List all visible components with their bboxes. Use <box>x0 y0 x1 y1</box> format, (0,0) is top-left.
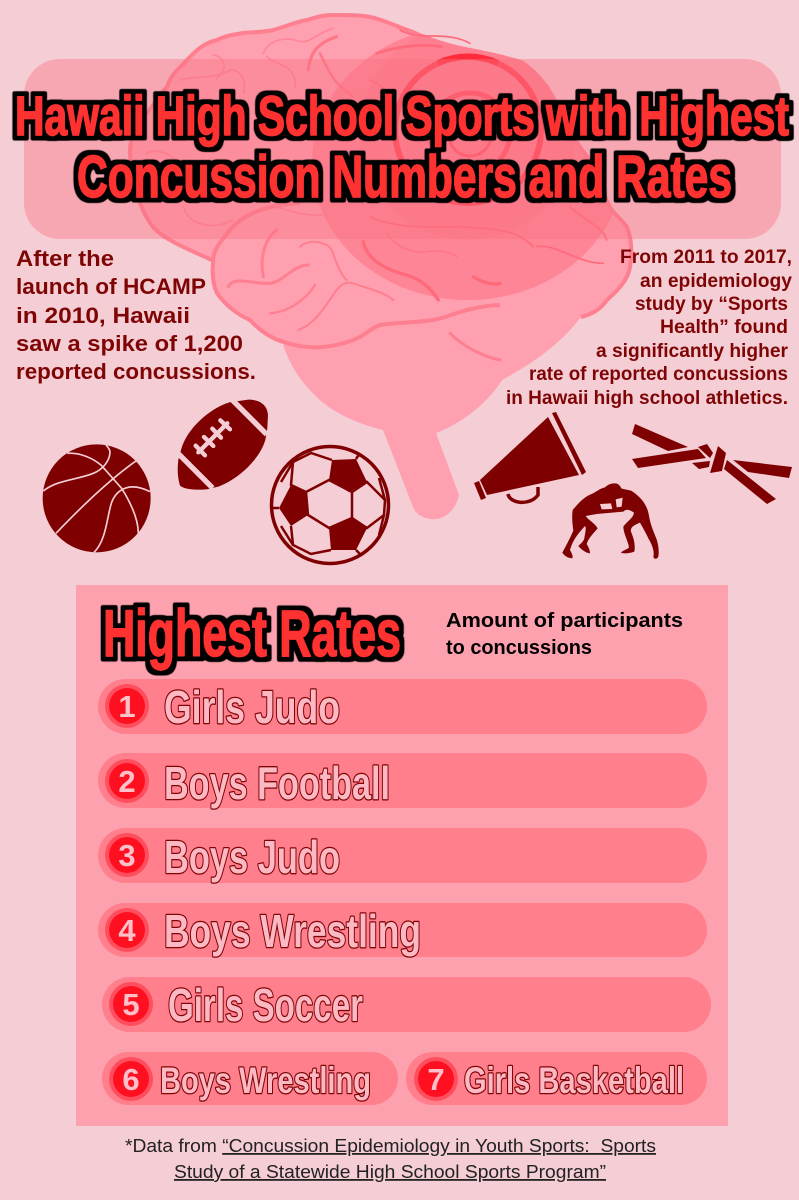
source footnote: *Data from “Concussion Epidemiology in Youth Sports: Sports <box>125 1136 656 1156</box>
row 6: boys wrestling: 6 <box>122 1062 140 1097</box>
icon: judo belt <box>632 424 792 504</box>
text block: HCAMP spike: reported concussions. <box>16 359 256 384</box>
row 4: boys wrestling: Boys Wrestling <box>164 905 421 957</box>
row 1: girls judo <box>98 679 707 734</box>
row 3: boys judo: 3 <box>118 838 136 873</box>
left upper lobe veins <box>147 28 353 225</box>
title band <box>24 59 781 239</box>
row 3: boys judo <box>98 828 707 883</box>
cerebellum and stem <box>283 300 581 519</box>
row 4: boys wrestling <box>98 903 707 957</box>
right upper lobe veins <box>370 30 607 263</box>
source footnote: Study of a Statewide High School Sports Program” <box>174 1162 606 1182</box>
row 2: boys football: 2 <box>118 764 136 799</box>
row 3: boys judo: Boys Judo <box>164 831 340 883</box>
row 5: girls soccer: 5 <box>122 987 140 1022</box>
row 5: girls soccer <box>102 977 711 1032</box>
row 4: boys wrestling: 4 <box>118 913 136 948</box>
legend note: to concussions <box>446 636 592 659</box>
heading: highest rates: Highest Rates <box>103 596 401 670</box>
text block: HCAMP spike: launch of HCAMP <box>16 274 206 299</box>
text block: HCAMP spike: saw a spike of 1,200 <box>16 331 243 356</box>
source footnote <box>125 1136 656 1182</box>
impact zone rings <box>312 24 624 300</box>
text block: epidemiology study: a significantly higher <box>596 340 788 362</box>
legend note <box>446 609 683 659</box>
row 7: girls basketball: 7 <box>427 1062 445 1097</box>
row 6: boys wrestling: Boys Wrestling <box>160 1060 371 1101</box>
text block: epidemiology study: an epidemiology <box>640 270 792 292</box>
row 1: girls judo: 1 <box>118 689 136 724</box>
legend note: Amount of participants <box>446 609 683 632</box>
panel background <box>76 585 728 1126</box>
title <box>15 84 789 210</box>
lower brain lobe <box>213 203 581 347</box>
text block: epidemiology study: From 2011 to 2017, <box>620 246 792 268</box>
row 6: boys wrestling <box>102 1052 398 1105</box>
row 2: boys football: Boys Football <box>164 757 390 809</box>
brain illustration <box>130 15 631 519</box>
icon: soccer ball <box>272 446 388 564</box>
row 5: girls soccer: Girls Soccer <box>168 979 363 1031</box>
lower lobe veins <box>228 230 500 360</box>
icon: american football <box>178 400 268 490</box>
panel: highest rates <box>76 585 728 1126</box>
text block: HCAMP spike: in 2010, Hawaii <box>16 303 190 328</box>
icon: megaphone <box>474 412 586 502</box>
text block: HCAMP spike <box>16 246 256 384</box>
text block: epidemiology study: in Hawaii high school athletics. <box>506 387 788 409</box>
icon: wrestlers <box>562 483 659 559</box>
icon: basketball <box>43 444 151 552</box>
row 2: boys football <box>98 753 707 809</box>
row 1: girls judo: Girls Judo <box>164 681 340 733</box>
text block: epidemiology study: rate of reported concussions <box>529 363 788 385</box>
row 7: girls basketball <box>406 1052 707 1105</box>
lobe outlines <box>130 15 631 347</box>
upper brain lobes <box>130 15 631 340</box>
row 7: girls basketball: Girls Basketball <box>464 1060 684 1101</box>
text block: epidemiology study <box>506 246 792 409</box>
text block: epidemiology study: study by “Sports <box>635 293 788 315</box>
text block: epidemiology study: Health” found <box>660 316 788 338</box>
text block: HCAMP spike: After the <box>16 246 114 271</box>
